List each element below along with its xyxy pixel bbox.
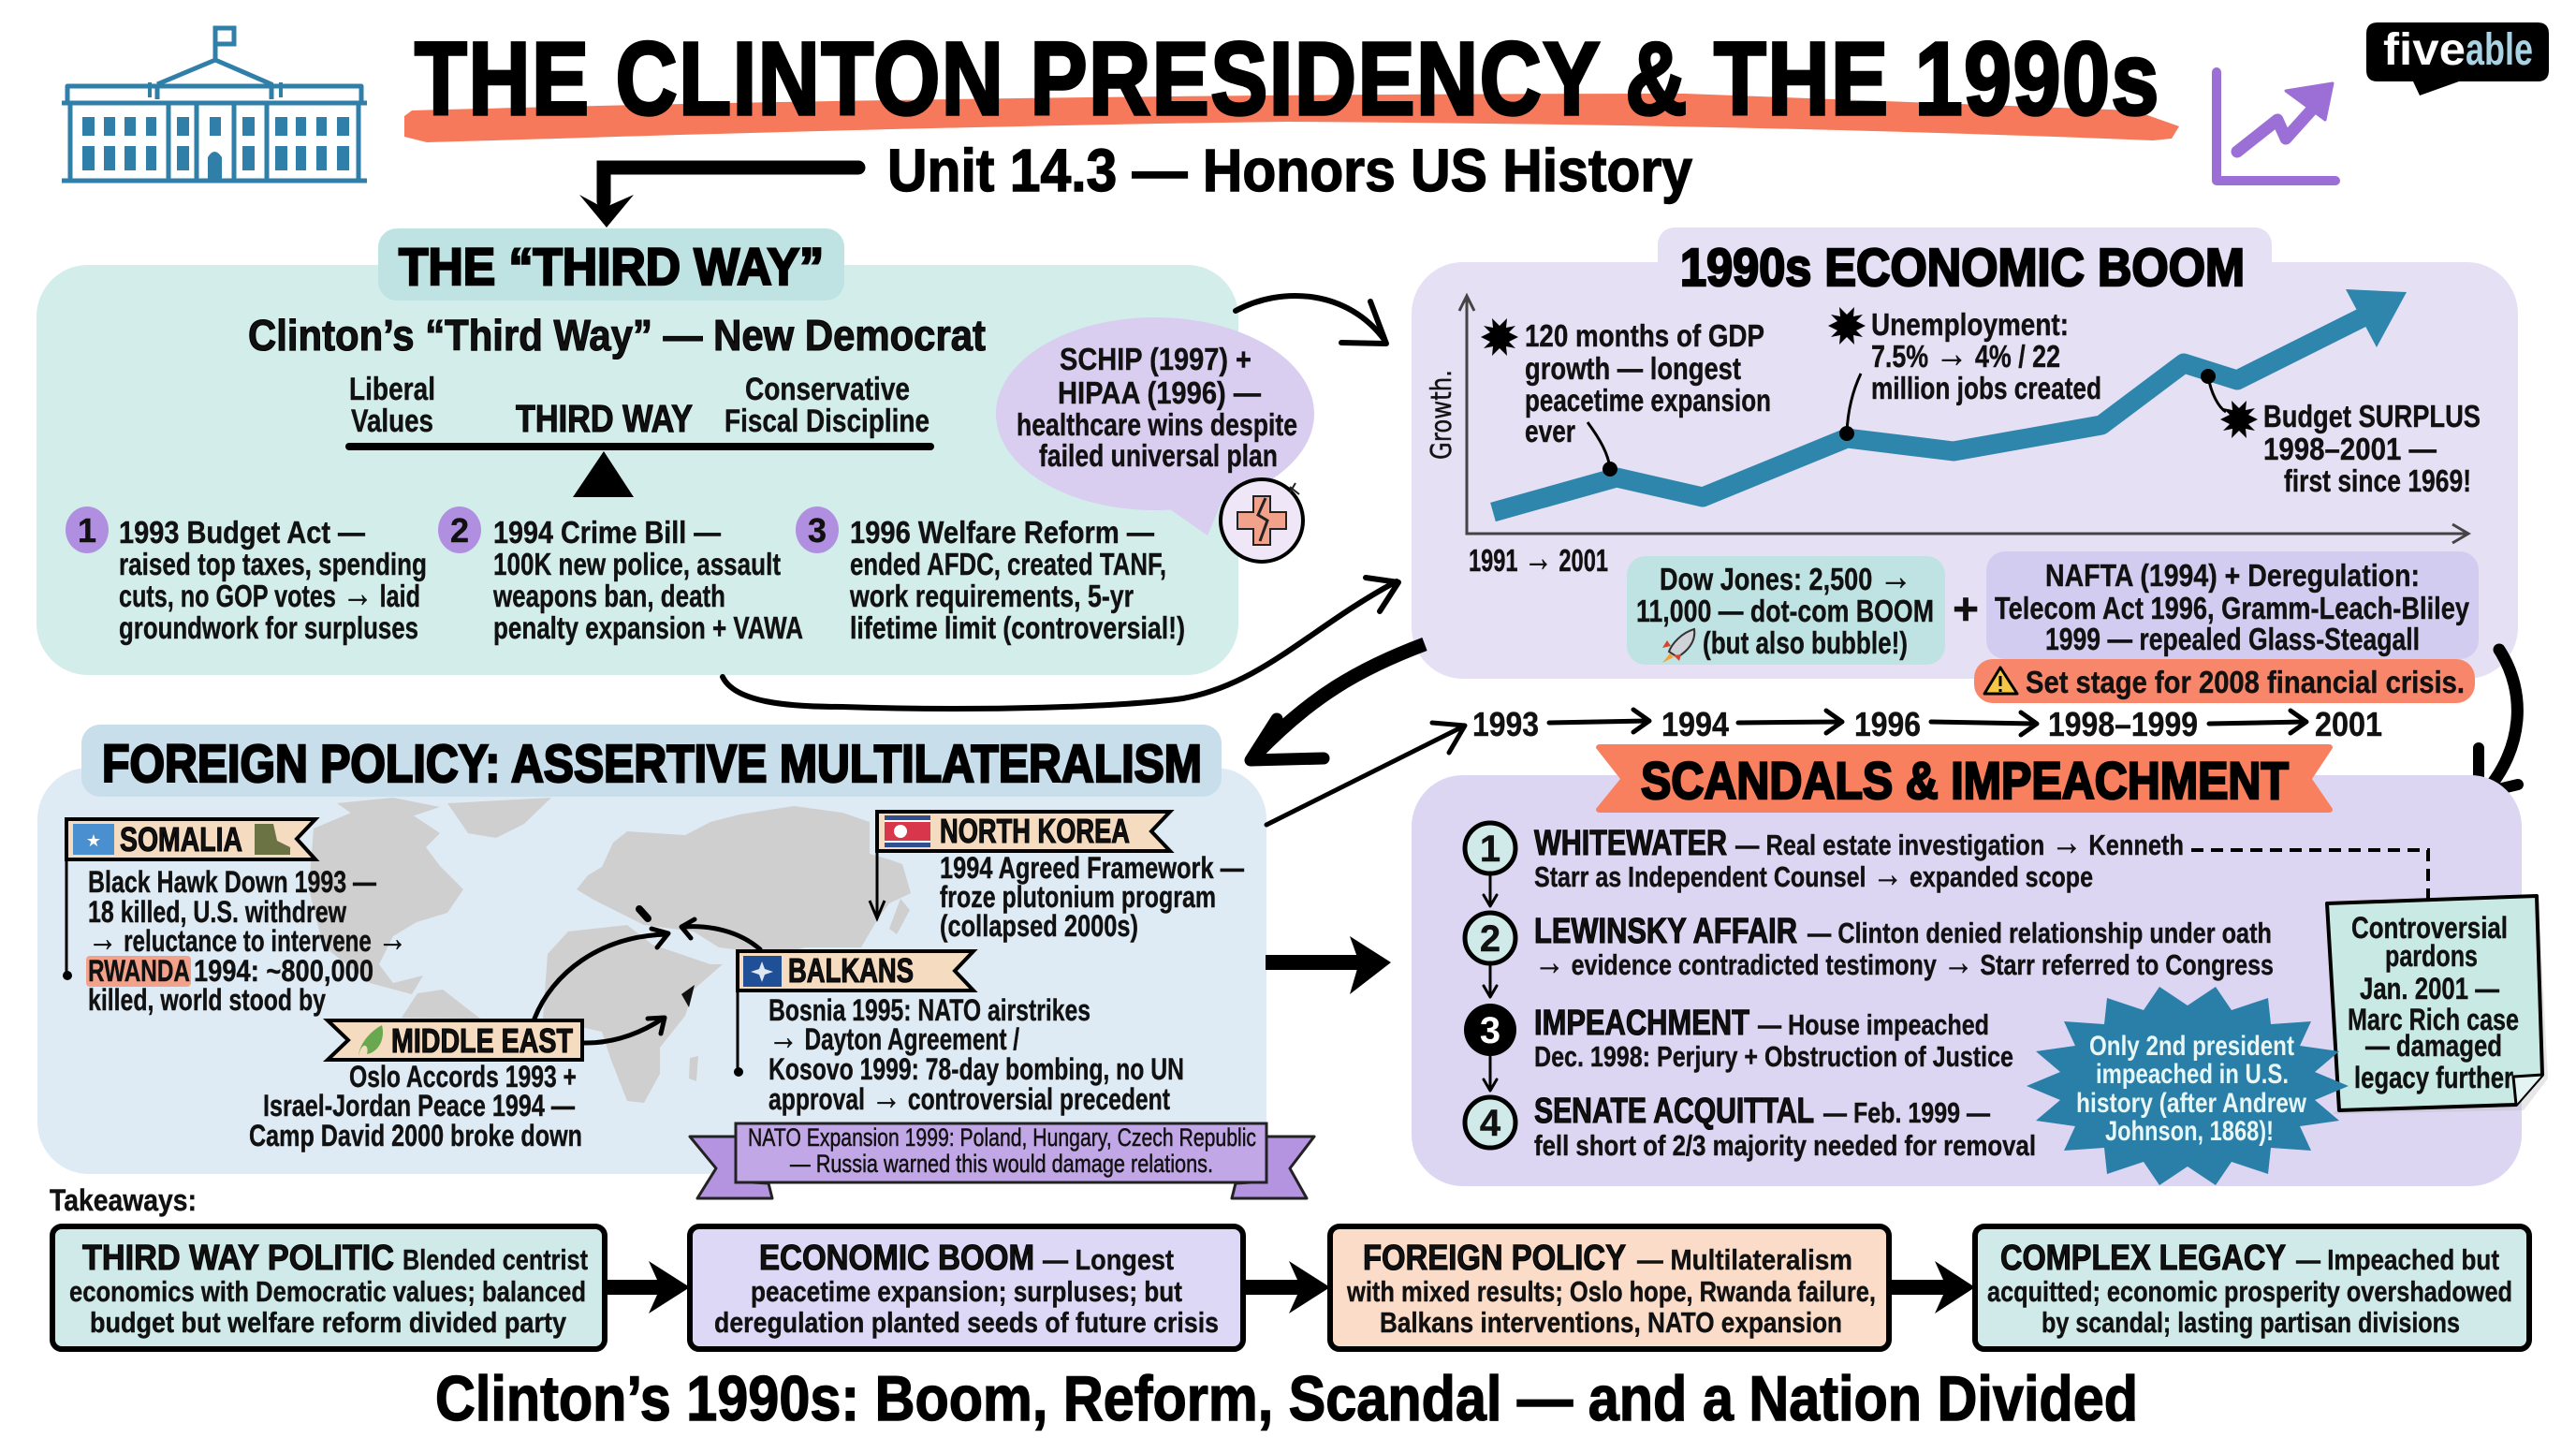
timeline: 1993 to 2001: 1998–1999 [2048,705,2198,743]
step: lewinsky affair [1465,912,2274,983]
arrow: takeaway 1 to 2 [605,1261,690,1313]
step: impeachment: — House impeached [1758,1008,1989,1041]
card: nafta and deregulation: 1999 — repealed Glass-Steagall [2045,622,2420,656]
banner: north korea [870,812,1170,918]
icon: boot [255,824,290,855]
item: 1993 budget act: cuts, no GOP votes → laid [119,571,420,616]
panel: third way [37,228,1238,675]
text: somalia and rwanda: 18 killed, U.S. withdrew [88,895,346,929]
icon: olive branch [359,1025,383,1056]
text: middle east: Camp David 2000 broke down [249,1119,582,1152]
banner: balkans: BALKANS [788,951,914,990]
label: takeaways: Takeaways: [50,1183,197,1217]
annotation: gdp growth: peacetime expansion [1525,383,1771,418]
takeaway: foreign policy: Balkans interventions, NATO expansion [1380,1306,1842,1339]
step: senate acquittal: 4 [1480,1103,1501,1144]
annotation: budget surplus: Budget SURPLUS [2263,399,2481,433]
step: senate acquittal: — Feb. 1999 — [1823,1096,1990,1129]
item: 1993 budget act: raised top taxes, spending [119,547,427,581]
arrow: third way to economic boom [1236,296,1386,344]
note: controversial pardons: legacy further [2354,1061,2513,1094]
takeaway: complex legacy: by scandal; lasting partisan divisions [2042,1306,2460,1339]
item: 1994 crime bill: penalty expansion + VAWA [493,610,803,645]
step: whitewater: 1 [1480,829,1500,870]
step: whitewater: — Real estate investigation → Kenneth [1735,821,2184,863]
starburst: only 2nd president: history (after Andrew [2076,1088,2307,1119]
balance scale: THIRD WAY [516,397,693,440]
balance scale: Fiscal Discipline [724,404,929,439]
takeaway: third way politic: Blended centrist [402,1243,588,1276]
card: nafta and deregulation [1986,551,2479,659]
step: whitewater [1465,821,2184,895]
item: 1993 budget act [66,506,427,645]
card: dow jones: 11,000 — dot-com BOOM [1636,594,1934,628]
text: balkans: Bosnia 1995: NATO airstrikes [768,993,1090,1027]
map arrows [534,909,760,1043]
arrow: subtitle to third way [579,168,858,227]
note: controversial pardons: Marc Rich case [2348,1003,2519,1036]
item: 1993 budget act: groundwork for surpluses [119,610,418,645]
icon: rocket [1662,629,1694,663]
step: impeachment [1464,1004,2013,1073]
callout: healthcare speech bubble [996,317,1314,536]
heading: scandals banner: SCANDALS & IMPEACHMENT [1641,751,2289,810]
takeaway: third way politic: THIRD WAY POLITIC [82,1239,394,1278]
item: 1996 welfare reform: work requirements, 5-yr [849,579,1134,613]
card: dow jones: (but also bubble!) [1703,625,1908,660]
item: 1993 budget act: 1 [78,511,96,550]
takeaway: third way politic: economics with Democratic values; balanced [69,1275,586,1308]
arrow: takeaway 3 to 4 [1889,1261,1975,1313]
text: somalia and rwanda: RWANDA [88,954,190,988]
panel: scandals and impeachment [1412,744,2548,1186]
takeaway: complex legacy [1975,1226,2529,1349]
text: middle east [249,1060,582,1152]
step: senate acquittal: fell short of 2/3 majority needed for removal [1534,1129,2036,1162]
banner: somalia [63,819,315,980]
ribbon: nato expansion: NATO Expansion 1999: Poland, Hungary, Czech Republic [748,1123,1256,1152]
takeaway: economic boom: — Longest [1043,1243,1174,1276]
card: dow jones [1627,554,1945,665]
item: 1996 welfare reform: 3 [808,511,827,550]
annotation: gdp growth: ever [1525,414,1575,448]
timeline: 1993 to 2001: 1996 [1854,705,1921,743]
card: nafta and deregulation: Telecom Act 1996, Gramm-Leach-Bliley [1995,591,2470,625]
arrow: economic boom to scandals [2479,650,2518,794]
text: north korea: (collapsed 2000s) [940,909,1138,943]
text: middle east: Israel-Jordan Peace 1994 — [263,1089,575,1123]
step: lewinsky affair: → evidence contradicted testimony → Starr referred to Congress [1534,941,2274,983]
takeaway: third way politic [52,1226,605,1349]
logo: fiveable [2366,22,2549,95]
text: somalia and rwanda [86,865,407,1017]
logo: fiveable: able [2466,25,2533,75]
text: somalia and rwanda: Black Hawk Down 1993 — [88,865,376,899]
note: controversial pardons: — damaged [2365,1029,2502,1063]
text: north korea [940,851,1244,943]
ribbon: nato expansion [690,1123,1314,1198]
starburst: only 2nd president: Johnson, 1868)! [2105,1116,2274,1147]
banner: somalia: SOMALIA [120,820,242,858]
timeline: 1993 to 2001 [1472,705,2382,743]
annotation: budget surplus [2201,369,2481,498]
step: senate acquittal [1465,1092,2036,1162]
text: somalia and rwanda: → reluctance to intervene → [88,916,407,960]
annotation: budget surplus: 1998–2001 — [2263,432,2437,466]
starburst: only 2nd president: Only 2nd president [2089,1031,2294,1062]
arrow: takeaway 2 to 3 [1243,1261,1330,1313]
step: lewinsky affair: LEWINSKY AFFAIR [1534,912,1797,951]
arrow: foreign policy to scandals [1266,936,1391,994]
takeaway: complex legacy: — Impeached but [2296,1243,2499,1276]
banner: balkans [734,951,973,1077]
arrow: foreign policy to timeline [1266,723,1465,825]
takeaway: third way politic: budget but welfare reform divided party [90,1306,567,1339]
text: somalia and rwanda: killed, world stood by [88,983,326,1017]
panel: economic boom [1412,227,2518,703]
item: 1994 crime bill: 100K new police, assault [493,547,781,581]
takeaway: foreign policy [1330,1226,1889,1349]
callout: healthcare speech bubble: failed universal plan [1039,438,1278,473]
banner: north korea: NORTH KOREA [940,812,1130,850]
takeaway: economic boom: deregulation planted seeds of future crisis [714,1306,1219,1339]
heading: third way: THE “THIRD WAY” [399,237,824,296]
item: 1993 budget act: 1993 Budget Act — [119,515,365,550]
icon: medical cross [1221,479,1303,562]
annotation: gdp growth: growth — longest [1525,351,1741,386]
item: 1994 crime bill: 2 [450,511,469,550]
callout: 2008 crisis warning: Set stage for 2008 financial crisis. [2026,665,2465,699]
step: lewinsky affair: — Clinton denied relationship under oath [1808,917,2272,949]
annotation: unemployment: million jobs created [1871,371,2101,405]
balance scale: Liberal [349,372,435,407]
title with brush highlight: THE CLINTON PRESIDENCY & THE 1990s [415,22,2160,137]
timeline: 1993 to 2001: 2001 [2315,705,2382,743]
item: 1994 crime bill [438,506,803,645]
annotation: unemployment [1828,307,2101,441]
plus sign: + [1953,585,1979,635]
balance scale: Values [351,404,433,439]
world map [309,798,911,1103]
takeaway: economic boom [690,1226,1243,1349]
timeline: 1993 to 2001: 1994 [1661,705,1729,743]
heading: foreign policy: FOREIGN POLICY: ASSERTIVE MULTILATERALISM [102,734,1202,794]
note: controversial pardons: pardons [2385,939,2478,973]
note: controversial pardons: Jan. 2001 — [2360,972,2499,1005]
annotation: unemployment: 7.5% → 4% / 22 [1871,331,2060,376]
step: impeachment: Dec. 1998: Perjury + Obstruction of Justice [1534,1040,2013,1073]
step: impeachment: 3 [1480,1010,1500,1051]
arrow: economic boom to foreign policy [1251,644,1425,760]
subtitle: Unit 14.3 — Honors US History [887,137,1692,204]
step arrows [1484,873,1497,1091]
takeaway: foreign policy: — Multilateralism [1637,1243,1852,1276]
callout: 2008 crisis warning [1974,659,2475,703]
logo: fiveable: five [2383,25,2466,75]
text: north korea: 1994 Agreed Framework — [940,851,1244,885]
step: impeachment: IMPEACHMENT [1534,1004,1749,1043]
dashed connector to pardons note [2191,850,2428,899]
callout: healthcare speech bubble: SCHIP (1997) + [1060,342,1251,376]
annotation: gdp growth [1481,318,1771,477]
balance scale: Conservative [745,372,910,407]
banner: somalia: ★ [86,831,101,851]
callout: healthcare speech bubble: HIPAA (1996) — [1058,375,1261,410]
card: nafta and deregulation: NAFTA (1994) + Deregulation: [2045,558,2420,593]
icon: growth chart [2217,72,2335,181]
annotation: budget surplus: first since 1969! [2284,463,2471,498]
card: dow jones: Dow Jones: 2,500 → [1660,554,1912,599]
step: lewinsky affair: 2 [1480,918,1500,960]
line chart: growth [1426,289,2468,580]
text: balkans [768,993,1184,1118]
heading: economic boom: 1990s ECONOMIC BOOM [1680,238,2245,298]
step: whitewater: Starr as Independent Counsel → expanded scope [1534,853,2093,895]
note: controversial pardons: Controversial [2351,911,2508,945]
takeaway: foreign policy: with mixed results; Oslo hope, Rwanda failure, [1346,1275,1876,1308]
item: 1996 welfare reform: 1996 Welfare Reform — [850,515,1154,550]
step: whitewater: WHITEWATER [1534,824,1727,863]
timeline: 1993 to 2001: 1993 [1472,705,1539,743]
balance scale [349,372,930,497]
ribbon: nato expansion: — Russia warned this would damage relations. [790,1150,1213,1178]
line chart: growth: 1991 → 2001 [1469,536,1608,580]
annotation: unemployment: Unemployment: [1871,307,2069,342]
takeaway: foreign policy: FOREIGN POLICY [1363,1239,1626,1278]
text: balkans: → Dayton Agreement / [768,1014,1019,1058]
step: senate acquittal: SENATE ACQUITTAL [1534,1092,1814,1131]
icon: white house [62,28,367,181]
note: controversial pardons [2327,896,2548,1114]
item: 1996 welfare reform: lifetime limit (controversial!) [850,610,1185,645]
item: 1996 welfare reform: ended AFDC, created TANF, [850,547,1166,581]
callout: healthcare speech bubble: healthcare wins despite [1017,407,1297,442]
text: balkans: approval → controversial precedent [768,1074,1170,1118]
panel: foreign policy [37,725,1266,1174]
annotation: gdp growth: 120 months of GDP [1525,318,1764,353]
starburst: only 2nd president: impeached in U.S. [2096,1059,2289,1090]
takeaway: economic boom: ECONOMIC BOOM [759,1239,1034,1278]
banner: middle east: MIDDLE EAST [391,1021,573,1060]
item: 1996 welfare reform [796,506,1185,645]
item: 1994 crime bill: weapons ban, death [492,579,725,613]
subheading: new democrat: Clinton’s “Third Way” — New Democrat [248,311,986,360]
takeaway: complex legacy: COMPLEX LEGACY [2000,1239,2286,1278]
footer tagline: Clinton’s 1990s: Boom, Reform, Scandal — and a Nation Divided [435,1363,2138,1434]
text: north korea: froze plutonium program [940,880,1216,914]
text: middle east: Oslo Accords 1993 + [349,1060,577,1093]
item: 1994 crime bill: 1994 Crime Bill — [493,515,721,550]
takeaway: economic boom: peacetime expansion; surpluses; but [751,1275,1182,1308]
starburst: only 2nd president [2027,987,2349,1185]
line chart: growth: Growth. [1426,370,1458,460]
text: balkans: Kosovo 1999: 78-day bombing, no UN [768,1052,1184,1086]
arrow: third way loop to economic boom [723,578,1398,709]
text: somalia and rwanda: 1994: ~800,000 [194,954,373,988]
banner: middle east [328,1020,582,1060]
